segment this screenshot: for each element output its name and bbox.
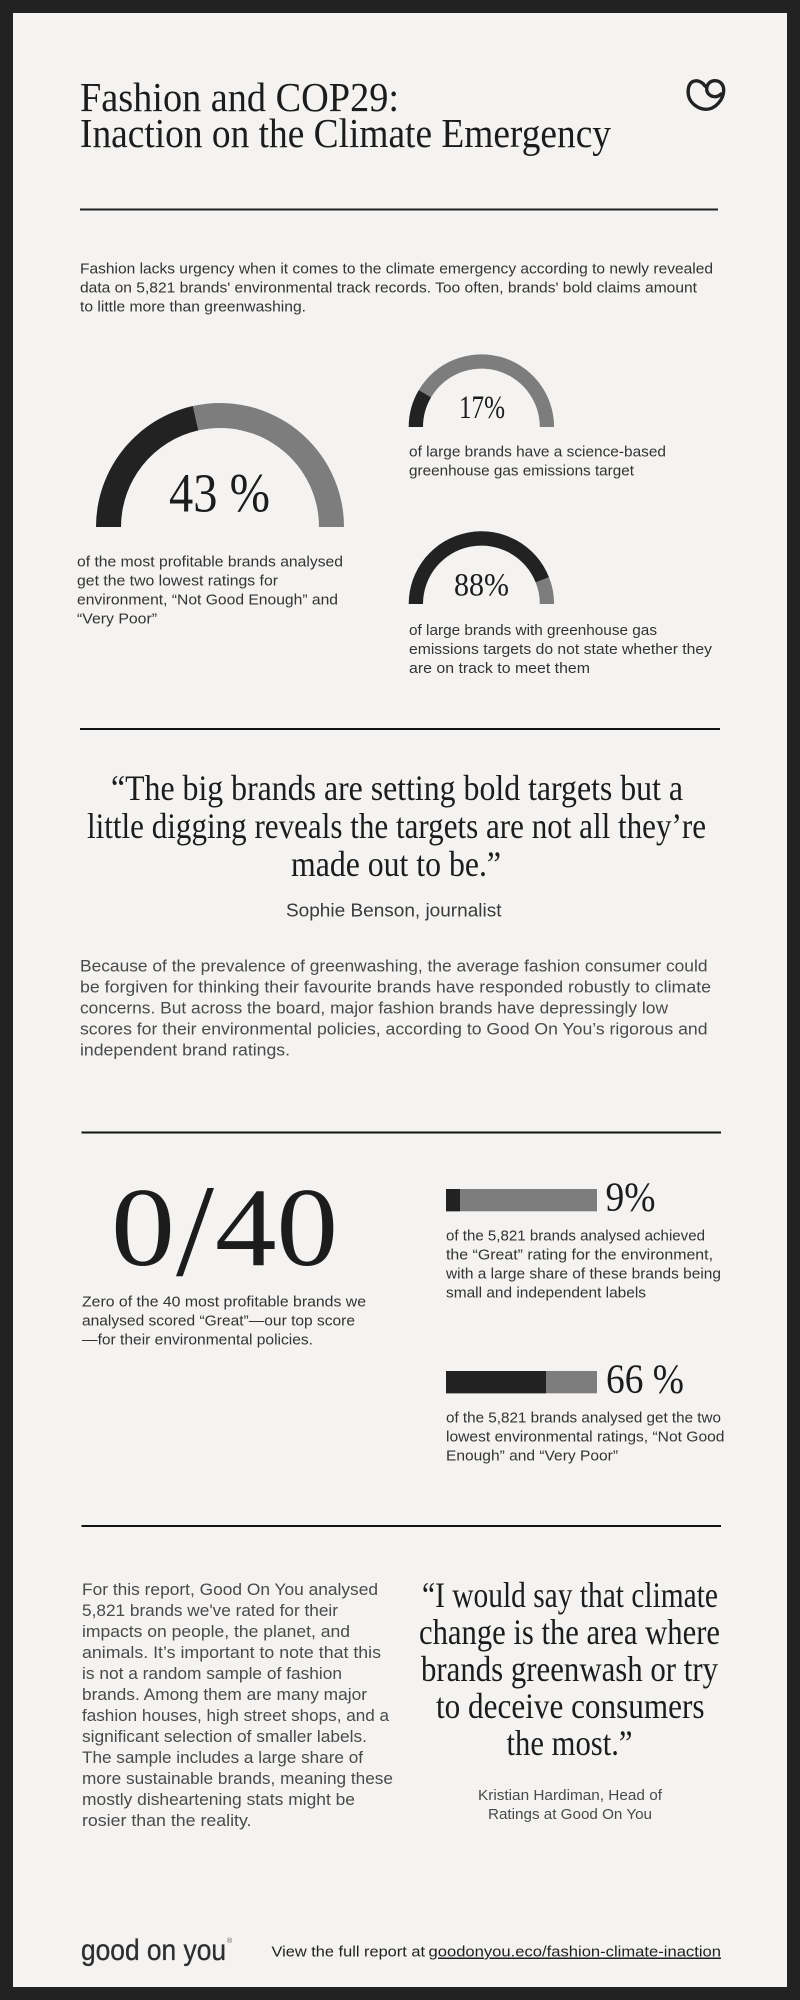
big stat: 0/40: 40: [215, 1166, 338, 1290]
caption: 88 percent: [409, 622, 713, 677]
caption: 0/40: analysed scored “Great”—our top score: [82, 1312, 355, 1330]
paragraph: greenwashing: concerns. But across the board, major fashion brands have depressingly low: [80, 998, 669, 1018]
gauge: 43 percent: [96, 403, 344, 527]
caption: 9 percent: of the 5,821 brands analysed achieved: [446, 1228, 705, 1244]
paragraph: greenwashing: be forgiven for thinking their favourite brands have responded robustly to climate: [80, 978, 711, 996]
bar: 9 percent: 9%: [606, 1174, 656, 1220]
quote: Kristian Hardiman: “I would say that climate: [422, 1575, 718, 1615]
caption: 66 percent: [446, 1410, 724, 1464]
quote: Sophie Benson: [87, 768, 706, 884]
caption: 0/40: Zero of the 40 most profitable brands we: [82, 1294, 366, 1310]
big stat: 0/40: 0: [111, 1166, 175, 1290]
caption: 43 percent: get the two lowest ratings for: [77, 572, 278, 590]
caption: 43 percent: “Very Poor”: [77, 610, 157, 628]
caption: 66 percent: lowest environmental ratings, “Not Good: [446, 1428, 724, 1446]
logo: good on you wordmark: good on you: [81, 1934, 226, 1967]
intro text: to little more than greenwashing.: [80, 298, 306, 316]
paragraph: report method: For this report, Good On You analysed: [82, 1580, 378, 1599]
paragraph: report method: [82, 1580, 393, 1830]
paragraph: report method: significant selection of smaller labels.: [82, 1727, 367, 1746]
paragraph: greenwashing: [80, 956, 711, 1060]
footer: report link: View the full report at: [272, 1944, 426, 1960]
paragraph: report method: mostly disheartening stats might be: [82, 1790, 355, 1809]
caption: 66 percent: of the 5,821 brands analysed get the two: [446, 1410, 721, 1426]
caption: 0/40: [82, 1294, 366, 1348]
quote attribution: Sophie Benson: Sophie Benson, journalist: [286, 900, 502, 920]
caption: 88 percent: of large brands with greenhouse gas: [409, 622, 657, 639]
caption: 9 percent: with a large share of these brands being: [445, 1266, 721, 1282]
gauge: 88 percent: 88%: [454, 568, 509, 604]
quote: Sophie Benson: made out to be.”: [291, 844, 501, 884]
quote: Kristian Hardiman: [419, 1575, 720, 1763]
footer: report link: [272, 1944, 721, 1960]
panel: ratings stats: [82, 1157, 724, 1464]
caption: 9 percent: the “Great” rating for the environment,: [446, 1246, 713, 1264]
gauge: 17 percent: [409, 354, 554, 427]
logo: good on you wordmark: ®: [227, 1937, 233, 1945]
gauge: 17 percent: 17%: [459, 390, 505, 426]
caption: 43 percent: environment, “Not Good Enough” and: [77, 592, 338, 608]
quote: Kristian Hardiman: brands greenwash or try: [421, 1649, 718, 1689]
intro text: [80, 260, 713, 316]
icon: heart logo: [688, 81, 724, 109]
paragraph: report method: 5,821 brands we've rated for their: [82, 1601, 338, 1620]
paragraph: report method: is not a random sample of fashion: [82, 1664, 342, 1683]
caption: 9 percent: [445, 1228, 721, 1302]
gauge: 88 percent: [409, 531, 554, 604]
paragraph: greenwashing: Because of the prevalence of greenwashing, the average fashion consumer could: [80, 956, 708, 976]
title: [80, 74, 611, 156]
paragraph: report method: brands. Among them are many major: [82, 1685, 367, 1704]
paragraph: report method: rosier than the reality.: [82, 1811, 252, 1830]
quote attribution: Kristian Hardiman: Ratings at Good On You: [488, 1806, 652, 1823]
bar: 9 percent: [446, 1174, 656, 1220]
caption: 43 percent: [77, 554, 343, 628]
big stat: 0/40: /: [176, 1157, 214, 1304]
quote: Kristian Hardiman: to deceive consumers: [436, 1686, 704, 1726]
quote attribution: Kristian Hardiman: Kristian Hardiman, Head of: [478, 1787, 663, 1804]
quote: Sophie Benson: “The big brands are setting bold targets but a: [111, 768, 683, 808]
quote: Kristian Hardiman: the most.”: [506, 1723, 632, 1763]
caption: 9 percent: small and independent labels: [446, 1284, 646, 1302]
caption: 88 percent: emissions targets do not state whether they: [409, 641, 713, 658]
paragraph: report method: animals. It’s important to note that this: [82, 1643, 381, 1662]
paragraph: greenwashing: scores for their environmental policies, according to Good On You’s rigorous and: [80, 1020, 708, 1038]
caption: 43 percent: of the most profitable brands analysed: [77, 554, 343, 570]
paragraph: report method: fashion houses, high street shops, and a: [82, 1706, 390, 1725]
intro text: Fashion lacks urgency when it comes to the climate emergency according to newly revealed: [80, 260, 713, 278]
intro text: data on 5,821 brands' environmental track records. Too often, brands' bold claims amount: [80, 280, 698, 296]
quote: Kristian Hardiman: change is the area where: [419, 1612, 720, 1652]
title: Fashion and COP29:: [80, 74, 399, 120]
paragraph: report method: more sustainable brands, meaning these: [82, 1769, 393, 1788]
caption: 88 percent: are on track to meet them: [409, 660, 590, 677]
caption: 17 percent: of large brands have a science-based: [409, 444, 666, 460]
paragraph: greenwashing: independent brand ratings.: [80, 1040, 290, 1060]
quote attribution: Kristian Hardiman: [478, 1787, 663, 1823]
gauge: 43 percent: 43 %: [169, 462, 270, 524]
footer: report link: goodonyou.eco/fashion-climate-inaction: [428, 1944, 721, 1960]
panel: gauge charts: [77, 354, 713, 677]
quote: Sophie Benson: little digging reveals the targets are not all they’re: [87, 806, 706, 846]
caption: 0/40: —for their environmental policies.: [82, 1332, 313, 1348]
paragraph: report method: The sample includes a large share of: [82, 1748, 363, 1767]
paragraph: report method: impacts on people, the planet, and: [82, 1622, 350, 1641]
caption: 17 percent: [409, 444, 666, 480]
bar: 66 percent: 66 %: [606, 1356, 684, 1402]
caption: 66 percent: Enough” and “Very Poor”: [446, 1448, 618, 1464]
caption: 17 percent: greenhouse gas emissions target: [409, 462, 635, 480]
bar: 66 percent: [446, 1356, 684, 1402]
title: Inaction on the Climate Emergency: [80, 110, 611, 156]
